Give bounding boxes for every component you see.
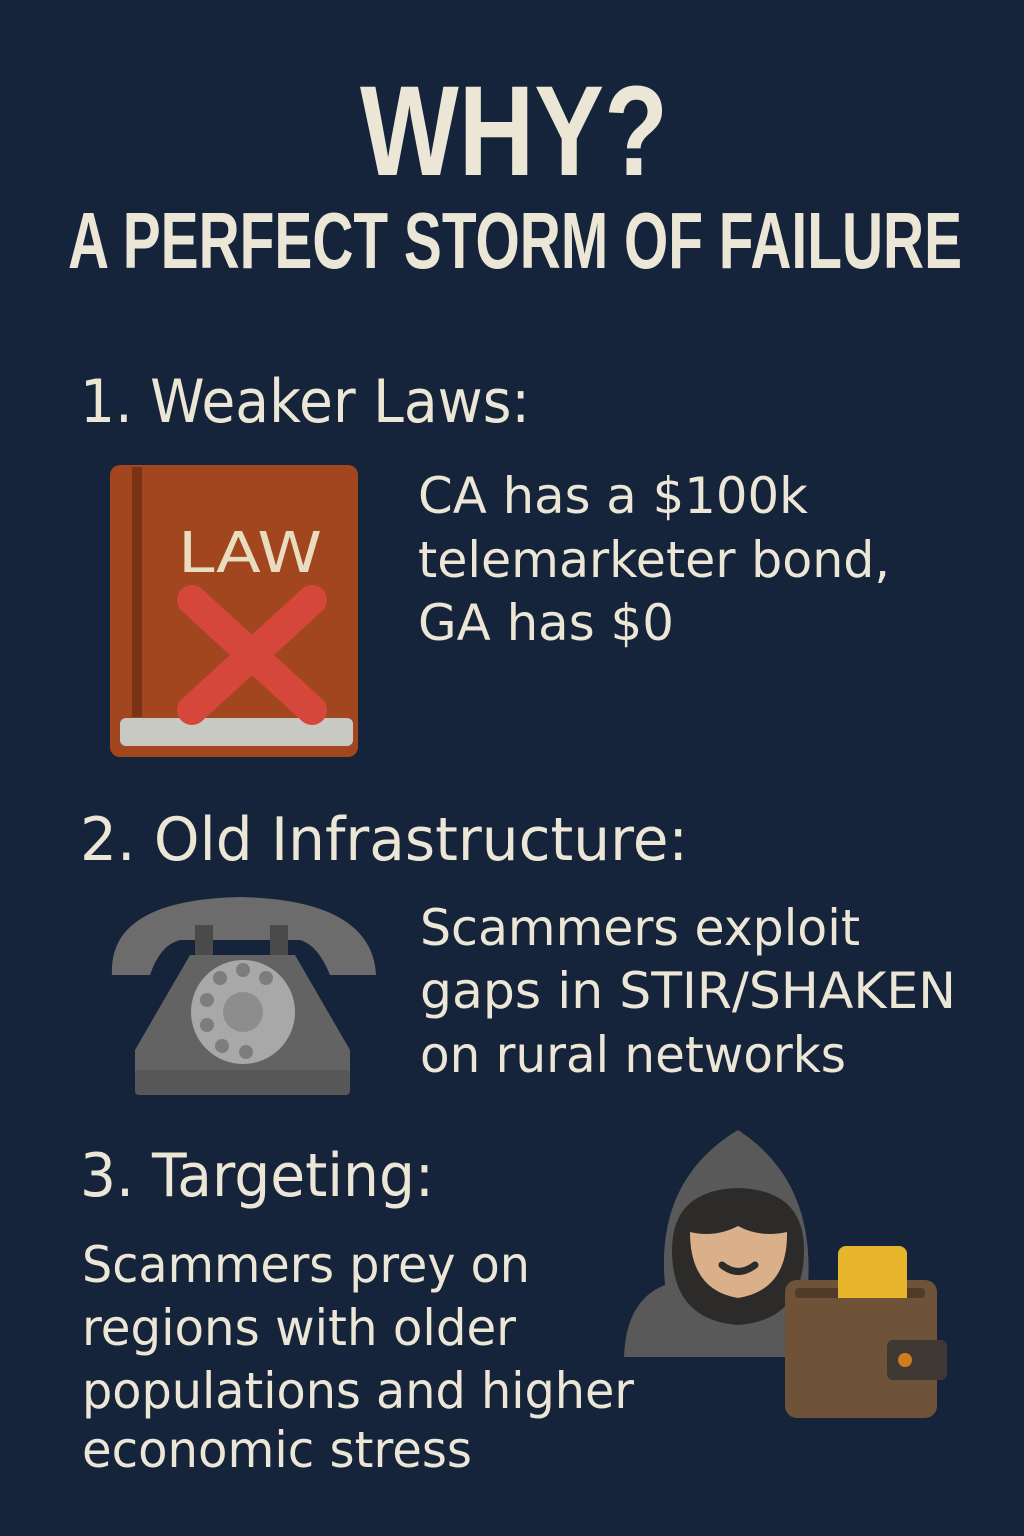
text: infrastructure body: Scammers exploit	[420, 899, 860, 957]
icon: law book	[110, 465, 358, 757]
text: laws body: telemarketer bond,	[418, 531, 890, 589]
icon: hooded scammer	[624, 1130, 835, 1357]
text: targeting body	[82, 1236, 634, 1479]
text: infrastructure body	[420, 899, 956, 1084]
text: targeting body: regions with older	[82, 1299, 516, 1357]
text: infrastructure body: on rural networks	[420, 1026, 846, 1084]
text: infrastructure body: gaps in STIR/SHAKEN	[420, 962, 956, 1020]
title: WHY?	[360, 60, 668, 203]
heading: old infrastructure: 2. Old Infrastructure:	[80, 805, 688, 875]
icon: wallet	[785, 1246, 947, 1418]
text: targeting body: populations and higher	[82, 1362, 634, 1420]
text: laws body: GA has $0	[418, 594, 674, 652]
heading: targeting: 3. Targeting:	[80, 1141, 434, 1211]
text: targeting body: Scammers prey on	[82, 1236, 530, 1294]
icon: law book: LAW	[178, 521, 322, 586]
text: laws body	[418, 467, 890, 652]
heading: weaker laws: 1. Weaker Laws:	[80, 367, 530, 437]
icon: rotary phone	[112, 897, 376, 1095]
text: targeting body: economic stress	[82, 1421, 472, 1479]
text: laws body: CA has a $100k	[418, 467, 808, 525]
